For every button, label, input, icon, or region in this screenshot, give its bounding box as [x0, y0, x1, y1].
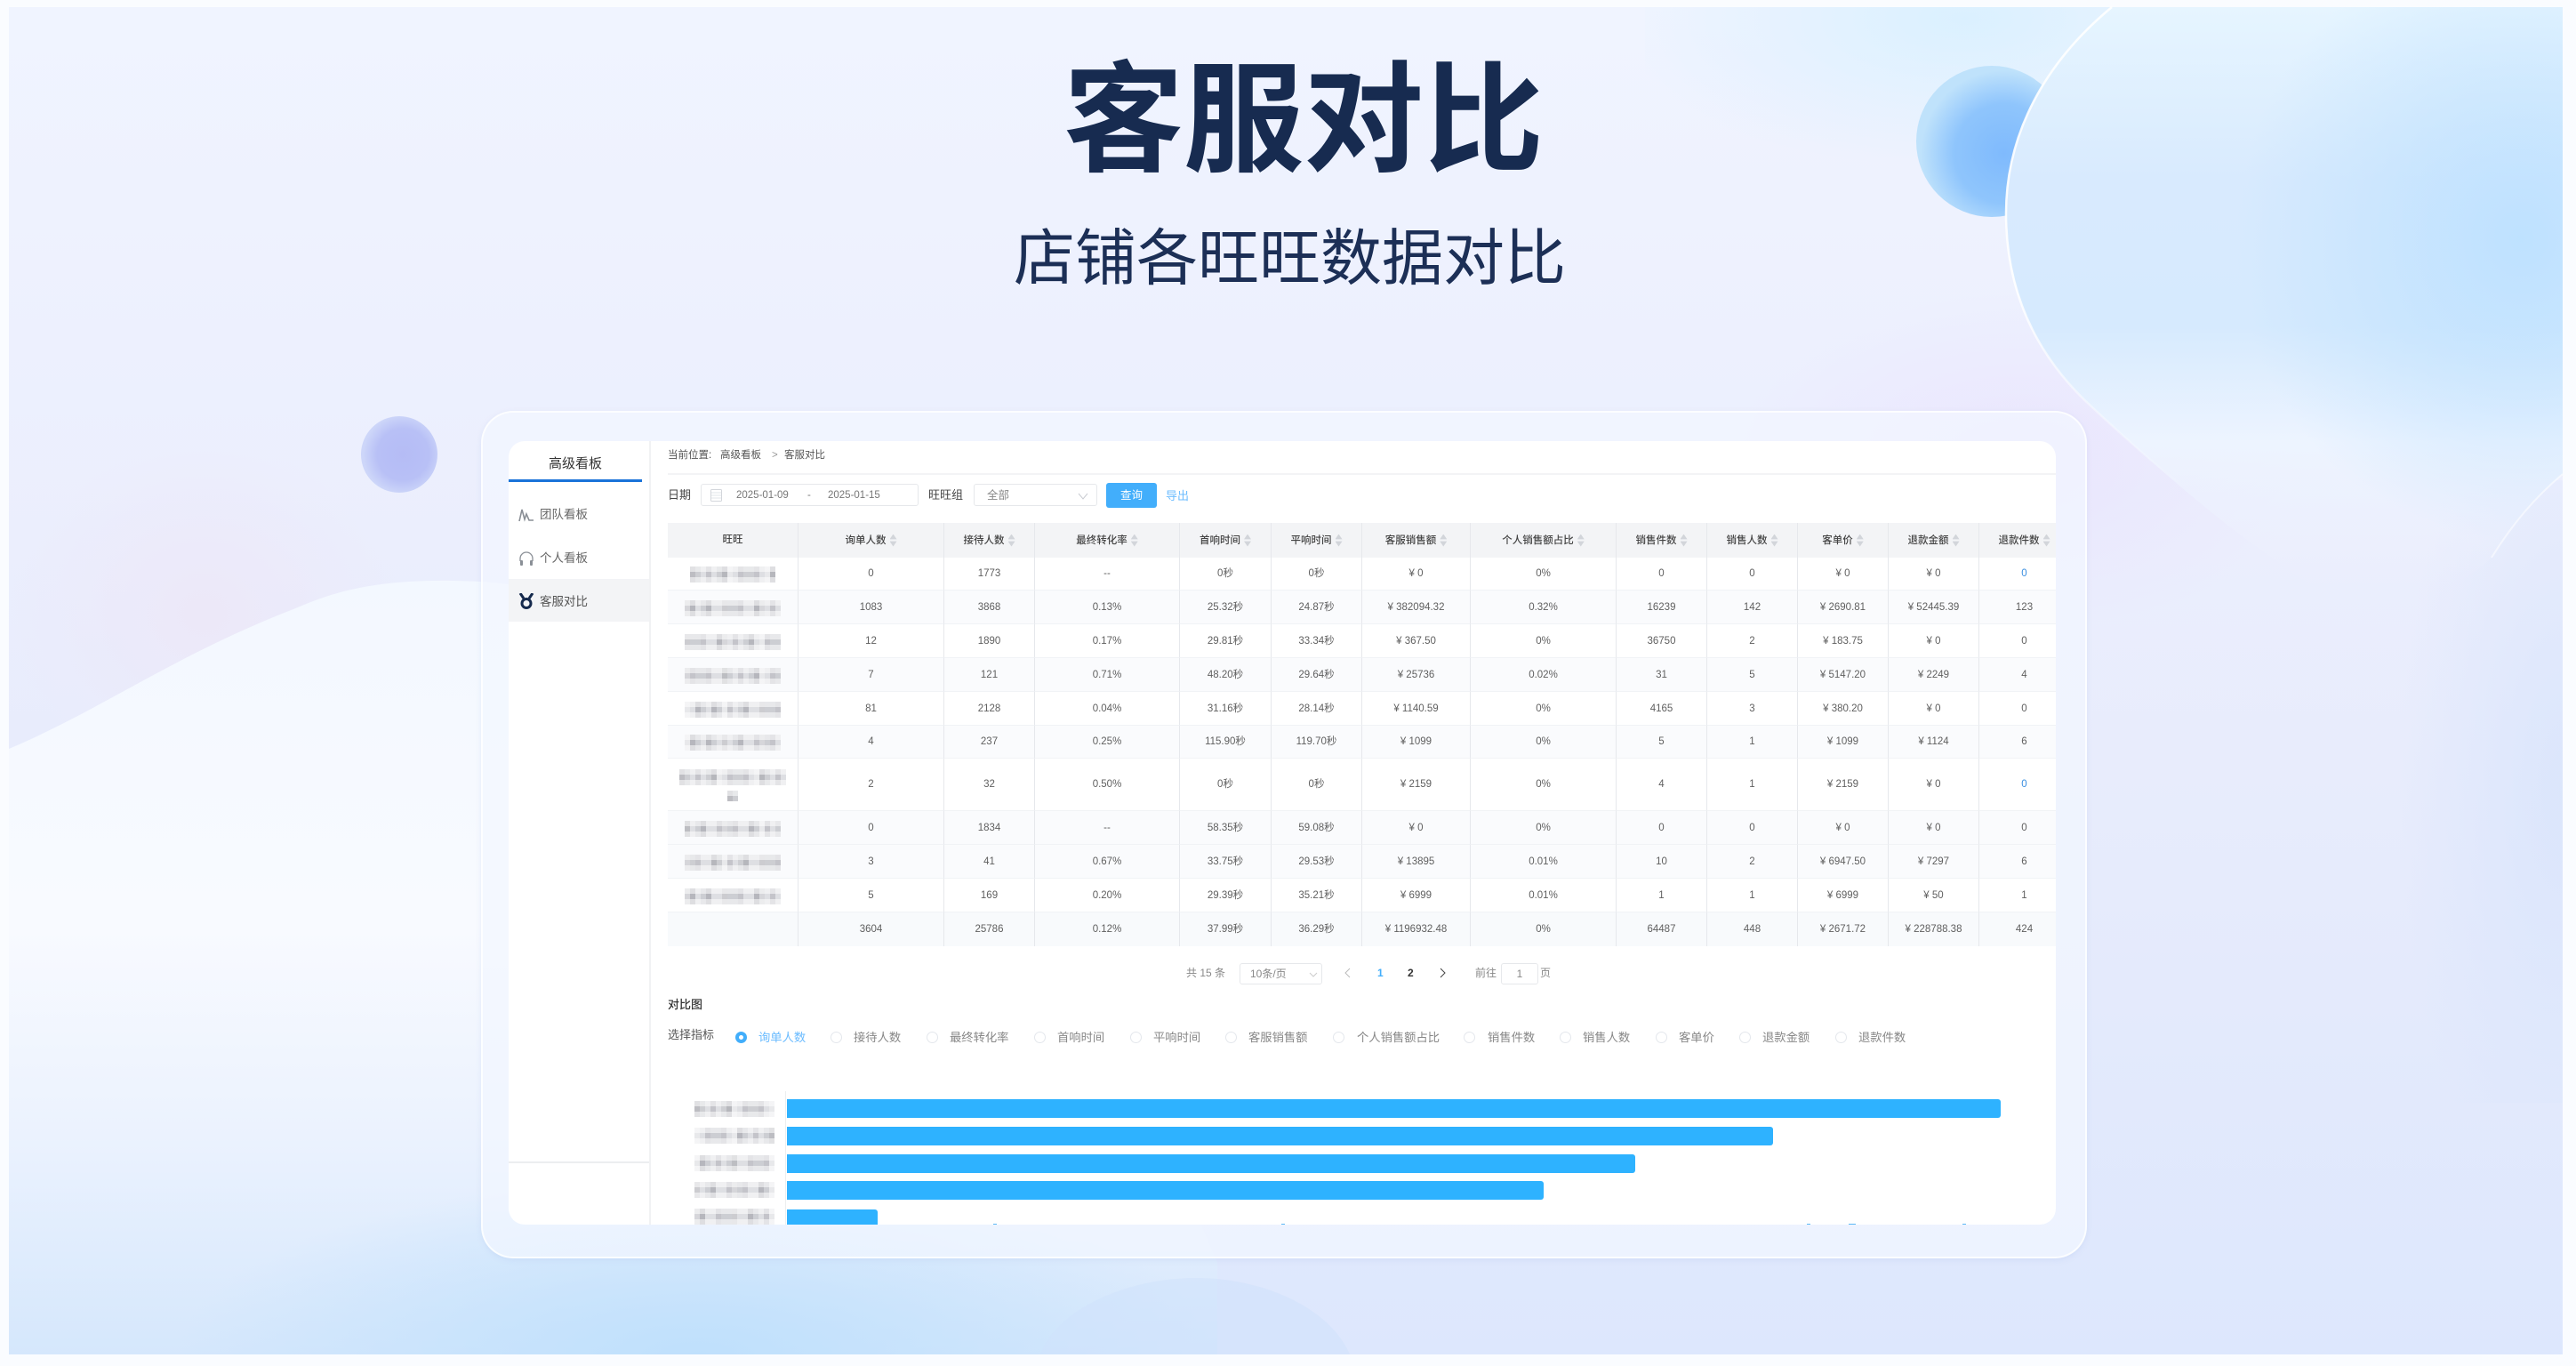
row 4: ¥ 25736 [1398, 670, 1434, 680]
table header: 销售件数 [1636, 535, 1677, 546]
row 8: 1834 [978, 823, 1000, 833]
row 3: 0% [1536, 636, 1551, 647]
row 5: 0 [2021, 703, 2027, 714]
row 9: 0.01% [1529, 856, 1558, 867]
table header: 个人销售额占比 [1502, 535, 1574, 546]
row 8: 59.08秒 [1298, 823, 1335, 833]
row 8: 0 [868, 823, 874, 833]
row 9: 41 [983, 856, 995, 867]
row 10: ¥ 6999 [1400, 890, 1432, 901]
row 2: 142 [1744, 602, 1761, 613]
totals row: ¥ 228788.38 [1906, 924, 1962, 935]
row 4 [668, 658, 2056, 692]
row 4: 31 [1656, 670, 1667, 680]
row 3: 2 [1749, 636, 1755, 647]
table header: 客服销售额 [1385, 535, 1436, 546]
totals row: 448 [1744, 924, 1761, 935]
totals row: 37.99秒 [1208, 924, 1243, 935]
label: group: 旺旺组 [928, 488, 963, 502]
page input: 1 [1517, 968, 1522, 980]
menu item: agent comparison (active) [509, 579, 649, 622]
row 1: ¥ 0 [1408, 568, 1423, 579]
row 10: 0.20% [1093, 890, 1121, 901]
totals row: 25786 [975, 924, 1003, 935]
row 6: ¥ 1124 [1918, 736, 1949, 747]
row 6: 5 [1658, 736, 1665, 747]
row 7 [668, 759, 2056, 811]
breadcrumb [668, 449, 825, 461]
row 5: ¥ 380.20 [1823, 703, 1863, 714]
row 8: 58.35秒 [1208, 823, 1243, 833]
menu item: team board: 团队看板 [540, 508, 588, 521]
metric selector: 退款金额 [1762, 1031, 1810, 1044]
row 10: 5 [868, 890, 874, 901]
row 7: 4 [1658, 779, 1665, 790]
row 1: 0秒 [1217, 568, 1233, 579]
row 6: 0% [1536, 736, 1551, 747]
totals row: 36.29秒 [1298, 924, 1335, 935]
metric selector: 客单价 [1679, 1031, 1714, 1044]
metric selector: 个人销售额占比 [1357, 1031, 1440, 1044]
page 2: 2 [1408, 967, 1414, 979]
row 5: 0.04% [1093, 703, 1121, 714]
row 1: 0 [1749, 568, 1755, 579]
row 9: 29.53秒 [1298, 856, 1335, 867]
label: date: 日期 [668, 488, 691, 502]
row 1: -- [1103, 568, 1111, 579]
totals row [798, 912, 2033, 946]
row 8: ¥ 0 [1926, 823, 1940, 833]
row 6 [668, 726, 2056, 759]
icon: blue sphere [1916, 66, 2067, 217]
row 7: 0.50% [1093, 779, 1121, 790]
pagination: 页 [1540, 967, 1551, 979]
bar 1 [787, 1099, 2001, 1118]
row 2: 3868 [978, 602, 1000, 613]
row 9 [668, 845, 2056, 879]
row 2: 25.32秒 [1208, 602, 1243, 613]
row 8: 0 [2021, 823, 2027, 833]
row 3: ¥ 0 [1926, 636, 1940, 647]
row 2: 123 [2016, 602, 2033, 613]
row 1: 0 [2021, 568, 2027, 579]
panel: sidebar [509, 441, 651, 1225]
menu item: agent comparison (active): 客服对比 [540, 595, 588, 608]
row 5: ¥ 0 [1926, 703, 1940, 714]
large glass blob top right [2006, 7, 2563, 601]
table header: 平响时间 [1291, 535, 1332, 546]
row 10: 0.01% [1529, 890, 1558, 901]
row 7: 2 [868, 779, 874, 790]
row 9: 3 [868, 856, 874, 867]
totals row: ¥ 2671.72 [1820, 924, 1866, 935]
row 3: 0 [2021, 636, 2027, 647]
icon: headset [519, 551, 534, 566]
bar 4 [787, 1181, 1544, 1200]
totals row: 64487 [1647, 924, 1675, 935]
row 8: 0 [1749, 823, 1755, 833]
row 10: ¥ 50 [1923, 890, 1944, 901]
row 2: 1083 [860, 602, 882, 613]
row 3: 0.17% [1093, 636, 1121, 647]
menu item: personal board [519, 551, 588, 566]
button: query: 查询 [1120, 489, 1143, 502]
table header: 客单价 [1822, 535, 1853, 546]
row 8 [668, 811, 2056, 845]
row 8: -- [1103, 823, 1111, 833]
row 3 [668, 624, 2056, 658]
row 7: ¥ 0 [1926, 779, 1940, 790]
table header: 旺旺 [722, 534, 743, 545]
next page [1440, 968, 1446, 978]
chart heading: 对比图 [668, 998, 702, 1011]
subtitle: 店铺各旺旺数据对比 [1014, 224, 1566, 293]
row 3: 33.34秒 [1298, 636, 1335, 647]
date range input [701, 484, 919, 506]
row 1 [668, 558, 2056, 591]
breadcrumb: > [772, 450, 778, 461]
row 7: ¥ 2159 [1400, 779, 1432, 790]
bar 2 [787, 1127, 1773, 1145]
row 2: 16239 [1647, 602, 1675, 613]
row 2 [668, 591, 2056, 624]
button: query [1106, 483, 1157, 508]
row 1: 0秒 [1309, 568, 1324, 579]
row 5: 3 [1749, 703, 1755, 714]
row 3: 36750 [1647, 636, 1675, 647]
table header: 接待人数 [964, 535, 1005, 546]
row 1: 0% [1536, 568, 1551, 579]
row 5: 2128 [978, 703, 1000, 714]
row 6: 0.25% [1093, 736, 1121, 747]
row 4: 4 [2021, 670, 2027, 680]
row 2: 0.32% [1529, 602, 1558, 613]
row 2: ¥ 2690.81 [1820, 602, 1866, 613]
row 3: 1890 [978, 636, 1000, 647]
row 4: 0.71% [1093, 670, 1121, 680]
totals row: 424 [2016, 924, 2033, 935]
pagination: 共 15 条 [1186, 967, 1225, 979]
title: 客服对比 [1063, 53, 1544, 188]
row 4: 7 [868, 670, 874, 680]
date range input: 2025-01-09 [736, 490, 789, 501]
row 9: 10 [1656, 856, 1667, 867]
metric selector: 销售人数 [1583, 1031, 1630, 1044]
breadcrumb: 高级看板 [720, 450, 761, 461]
row 2: ¥ 382094.32 [1388, 602, 1444, 613]
row 9: ¥ 6947.50 [1820, 856, 1866, 867]
sidebar active underline [509, 479, 642, 482]
metric selector: 平响时间 [1153, 1031, 1200, 1044]
row 1: 0 [1658, 568, 1665, 579]
metric selector: 销售件数 [1488, 1031, 1535, 1044]
row 1: ¥ 0 [1835, 568, 1850, 579]
row 1: 0 [868, 568, 874, 579]
metric selector: 询单人数 [758, 1031, 806, 1044]
row 6: 4 [868, 736, 874, 747]
row 5: 28.14秒 [1298, 703, 1335, 714]
row 5: 31.16秒 [1208, 703, 1243, 714]
row 5: 81 [865, 703, 877, 714]
row 9: ¥ 7297 [1918, 856, 1949, 867]
row 4: 0.02% [1529, 670, 1558, 680]
row 4: 48.20秒 [1208, 670, 1243, 680]
blurred category labels [694, 1101, 774, 1225]
row 6: 119.70秒 [1296, 736, 1336, 747]
breadcrumb: 客服对比 [784, 450, 825, 461]
bar 3 [787, 1154, 1635, 1173]
row 8: ¥ 0 [1835, 823, 1850, 833]
date range input: - [807, 490, 811, 501]
metric selector: 退款件数 [1858, 1031, 1906, 1044]
row 4: ¥ 5147.20 [1820, 670, 1866, 680]
row 4: ¥ 2249 [1918, 670, 1949, 680]
row 10: 1 [1658, 890, 1665, 901]
row 3: ¥ 367.50 [1396, 636, 1436, 647]
row 7: 0 [2021, 779, 2027, 790]
row 3: 12 [865, 636, 877, 647]
row 6: 115.90秒 [1205, 736, 1246, 747]
row 7: 32 [983, 779, 995, 790]
row 7: 0% [1536, 779, 1551, 790]
row 4: 5 [1749, 670, 1755, 680]
page size select [1240, 963, 1322, 984]
row 10: 29.39秒 [1208, 890, 1243, 901]
totals row: 0.12% [1093, 924, 1121, 935]
panel: dashboard screenshot [509, 441, 2056, 1225]
row 5 [668, 692, 2056, 726]
metric selector: 最终转化率 [950, 1031, 1008, 1044]
icon: calendar [710, 489, 722, 502]
row 6: ¥ 1099 [1400, 736, 1432, 747]
table header: 询单人数 [845, 535, 886, 546]
row 10: ¥ 6999 [1827, 890, 1858, 901]
pagination [1186, 963, 1551, 984]
icon: medal [519, 593, 534, 609]
icon: purple sphere [361, 416, 437, 493]
radio selected [735, 1032, 747, 1043]
row 9: 2 [1749, 856, 1755, 867]
row 8: 0 [1658, 823, 1665, 833]
row 4: 121 [981, 670, 998, 680]
row 8: 0% [1536, 823, 1551, 833]
page 1: 1 [1377, 967, 1384, 979]
metric selector: 选择指标 [668, 1028, 714, 1041]
row 8: ¥ 0 [1408, 823, 1423, 833]
table header: 最终转化率 [1076, 535, 1128, 546]
row 9: 0.67% [1093, 856, 1121, 867]
row 7: 0秒 [1309, 779, 1324, 790]
filter bar [668, 483, 1189, 508]
row 5: 0% [1536, 703, 1551, 714]
row 6: 237 [981, 736, 998, 747]
bar chart [694, 1091, 2001, 1225]
row 3: ¥ 183.75 [1823, 636, 1863, 647]
row 7: 0秒 [1217, 779, 1233, 790]
row 10: 1 [2021, 890, 2027, 901]
row 6: ¥ 1099 [1827, 736, 1858, 747]
totals row: 0% [1536, 924, 1551, 935]
row 1: ¥ 0 [1926, 568, 1940, 579]
row 1: 1773 [978, 568, 1000, 579]
table header: 退款金额 [1908, 535, 1949, 546]
sidebar heading: 高级看板 [549, 456, 602, 471]
row 4: 29.64秒 [1298, 670, 1335, 680]
totals row: 3604 [860, 924, 882, 935]
metric selector [668, 1028, 1906, 1044]
row 9: 6 [2021, 856, 2027, 867]
row 7: ¥ 2159 [1827, 779, 1858, 790]
breadcrumb: 当前位置: [668, 450, 711, 461]
metric selector: 首响时间 [1057, 1031, 1104, 1044]
row 2: 24.87秒 [1298, 602, 1335, 613]
row 9: ¥ 13895 [1398, 856, 1434, 867]
table header [668, 523, 2056, 946]
table header: 销售人数 [1727, 535, 1768, 546]
panel: glass card [481, 411, 2087, 1258]
bar 5 [787, 1209, 878, 1225]
metric selector: 接待人数 [854, 1031, 901, 1044]
menu item: team board [518, 508, 588, 522]
row 7: 1 [1749, 779, 1755, 790]
previous page [1344, 968, 1350, 978]
row 5: ¥ 1140.59 [1393, 703, 1439, 714]
table header: 退款件数 [1999, 535, 2040, 546]
row 6: 1 [1749, 736, 1755, 747]
page size select: 10条/页 [1250, 968, 1287, 980]
group select [974, 484, 1097, 506]
row 2: 0.13% [1093, 602, 1121, 613]
date range input: 2025-01-15 [828, 490, 880, 501]
row 10: 35.21秒 [1298, 890, 1335, 901]
menu item: personal board: 个人看板 [540, 551, 588, 565]
row 10: 1 [1749, 890, 1755, 901]
row 3: 29.81秒 [1208, 636, 1243, 647]
page input [1501, 963, 1538, 984]
totals row: ¥ 1196932.48 [1385, 924, 1447, 935]
row 2: ¥ 52445.39 [1908, 602, 1959, 613]
row 10 [668, 879, 2056, 912]
table header: 首响时间 [1200, 535, 1240, 546]
pagination: 前往 [1475, 967, 1497, 979]
icon: pulse [518, 509, 534, 522]
row 5: 4165 [1650, 703, 1673, 714]
metric selector: 客服销售额 [1248, 1031, 1307, 1044]
row 10: 169 [981, 890, 998, 901]
group select: 全部 [987, 489, 1009, 502]
row 6: 6 [2021, 736, 2027, 747]
hill shape bottom left [9, 581, 1218, 1354]
data table [668, 523, 2056, 946]
button: export: 导出 [1166, 489, 1189, 502]
row 9: 33.75秒 [1208, 856, 1243, 867]
